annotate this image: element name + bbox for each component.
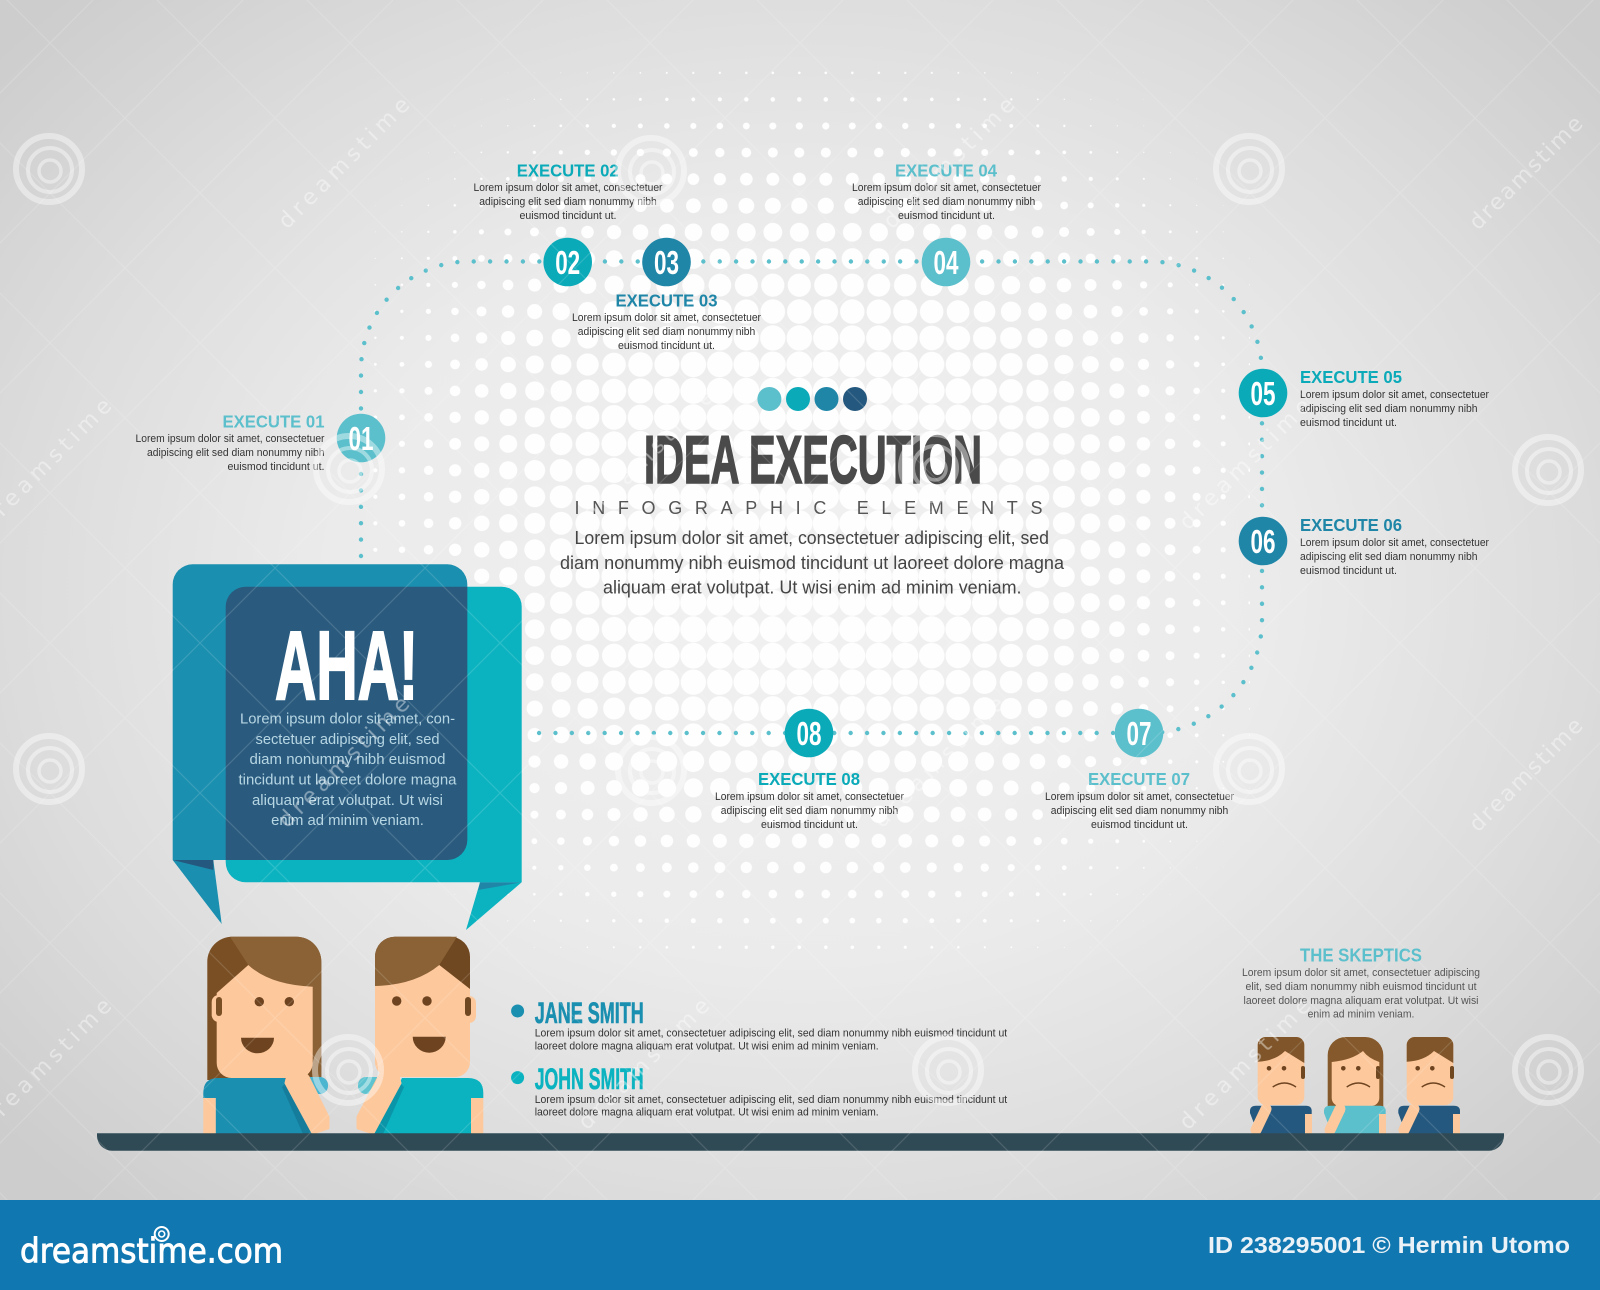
text: execute 04: Lorem ipsum dolor sit amet, consectetuer xyxy=(852,182,1041,194)
subtitle: INFOGRAPHIC ELEMENTS xyxy=(574,498,1042,518)
dotted path xyxy=(361,262,1262,733)
bubble overlap xyxy=(226,587,467,860)
text: execute 03: adipiscing elit sed diam nonummy nibh xyxy=(578,326,755,338)
intro paragraph: diam nonummy nibh euismod tincidunt ut laoreet dolore magna xyxy=(560,553,1065,573)
step 08 marker: 08 xyxy=(796,715,822,752)
speech bubbles xyxy=(173,564,522,930)
text: execute 08: EXECUTE 08 xyxy=(758,769,860,789)
person text: John Smith: Lorem ipsum dolor sit amet, consectetuer adipiscing elit, sed diam nonummy nibh euismod tincidunt ut xyxy=(535,1094,1007,1106)
person text: Jane Smith xyxy=(511,997,1007,1052)
bubble paragraph: aliquam erat volutpat. Ut wisi xyxy=(252,792,443,809)
text: execute 06: adipiscing elit sed diam nonummy nibh xyxy=(1300,551,1478,563)
text: execute 01: EXECUTE 01 xyxy=(222,412,325,432)
step 04 marker: 04 xyxy=(934,244,959,281)
text: execute 04: euismod tincidunt ut. xyxy=(898,210,995,222)
skeptics text xyxy=(1242,946,1480,1021)
text: execute 01 xyxy=(136,412,325,473)
text: execute 03 xyxy=(572,291,761,352)
person text: Jane Smith: laoreet dolore magna aliquam erat volutpat. Ut wisi enim ad minim veniam. xyxy=(535,1040,879,1052)
bubble paragraph: Lorem ipsum dolor sit amet, con- xyxy=(240,710,455,727)
watermark spirals xyxy=(16,136,1581,1103)
step 07 marker: 07 xyxy=(1126,715,1152,752)
left bubble tail xyxy=(173,860,222,924)
text: execute 05: adipiscing elit sed diam nonummy nibh xyxy=(1300,403,1478,415)
text: execute 03: euismod tincidunt ut. xyxy=(618,340,715,352)
text: execute 08 xyxy=(715,769,904,831)
person text: John Smith: laoreet dolore magna aliquam erat volutpat. Ut wisi enim ad minim veniam. xyxy=(535,1106,879,1118)
step 08 marker xyxy=(785,709,833,757)
text: execute 02: EXECUTE 02 xyxy=(517,161,619,181)
step 06 marker: 06 xyxy=(1250,523,1276,560)
text: execute 08: Lorem ipsum dolor sit amet, consectetuer xyxy=(715,791,904,803)
text: execute 04 xyxy=(852,161,1041,222)
intro paragraph xyxy=(560,528,1065,597)
text: execute 02 xyxy=(474,161,663,222)
bubble paragraph: diam nonummy nibh euismod xyxy=(250,751,446,768)
text: execute 07: EXECUTE 07 xyxy=(1088,769,1190,789)
step 03 marker xyxy=(642,238,691,286)
watermark wordmarks: dreamstime xyxy=(1175,994,1316,1135)
AHA heading: AHA! xyxy=(275,611,418,720)
text: execute 07: adipiscing elit sed diam nonummy nibh xyxy=(1051,805,1228,817)
person text: John Smith: JOHN SMITH xyxy=(535,1063,644,1096)
title: IDEA EXECUTION xyxy=(644,422,982,498)
text: execute 06 xyxy=(1300,515,1489,577)
watermark wordmarks: dreamstime xyxy=(1465,714,1588,837)
person text: Jane Smith: JANE SMITH xyxy=(535,997,644,1030)
skeptics text: laoreet dolore magna aliquam erat volutpat. Ut wisi xyxy=(1244,995,1478,1007)
step 01 marker xyxy=(337,414,385,462)
step 07 marker xyxy=(1115,709,1163,757)
step 06 marker xyxy=(1239,517,1287,565)
text: execute 07 xyxy=(1045,769,1234,831)
step 05 marker: 05 xyxy=(1250,375,1276,412)
text: execute 01: euismod tincidunt ut. xyxy=(228,461,324,473)
text: execute 07: Lorem ipsum dolor sit amet, consectetuer xyxy=(1045,791,1234,803)
footer logo: dreamstime.com xyxy=(20,1232,283,1272)
text: execute 05 xyxy=(1300,367,1489,429)
text: execute 08: adipiscing elit sed diam nonummy nibh xyxy=(721,805,898,817)
table bar xyxy=(97,1133,1504,1151)
person text: John Smith xyxy=(511,1063,1007,1118)
intro paragraph: aliquam erat volutpat. Ut wisi enim ad minim veniam. xyxy=(603,577,1022,597)
footer credit: ID 238295001 © Hermin Utomo xyxy=(1208,1232,1570,1258)
step 05 marker xyxy=(1239,369,1287,417)
watermark wordmarks: dreamstime xyxy=(274,692,415,833)
skeptics text: THE SKEPTICS xyxy=(1300,946,1422,966)
footer band xyxy=(0,1200,1600,1290)
text: execute 03: Lorem ipsum dolor sit amet, consectetuer xyxy=(572,312,761,324)
watermark wordmarks: dreamstime xyxy=(869,692,1010,833)
step 03 marker: 03 xyxy=(654,244,679,281)
text: execute 08: euismod tincidunt ut. xyxy=(761,819,858,831)
character: John xyxy=(358,937,483,1134)
text: execute 07: euismod tincidunt ut. xyxy=(1091,819,1188,831)
person text: Jane Smith: Lorem ipsum dolor sit amet, consectetuer adipiscing elit, sed diam nonummy nibh euismod tincidunt ut xyxy=(535,1028,1007,1040)
text: execute 05: EXECUTE 05 xyxy=(1300,367,1402,387)
text: execute 02: adipiscing elit sed diam nonummy nibh xyxy=(479,196,657,208)
text: execute 02: euismod tincidunt ut. xyxy=(520,210,616,222)
four coloured dots xyxy=(757,387,867,411)
step 02 marker xyxy=(543,238,592,286)
watermark wordmarks: dreamstime xyxy=(274,93,415,234)
text: execute 05: Lorem ipsum dolor sit amet, consectetuer xyxy=(1300,389,1489,401)
skeptics text: enim ad minim veniam. xyxy=(1308,1009,1414,1021)
step 02 marker: 02 xyxy=(555,244,580,281)
skeptic 3 xyxy=(1398,1037,1460,1134)
halftone dot field xyxy=(350,62,1250,962)
text: execute 04: adipiscing elit sed diam nonummy nibh xyxy=(858,196,1035,208)
text: execute 06: Lorem ipsum dolor sit amet, consectetuer xyxy=(1300,537,1489,549)
step 04 marker xyxy=(922,238,970,286)
text: execute 01: Lorem ipsum dolor sit amet, consectetuer xyxy=(136,433,325,445)
watermark wordmarks: dreamstime xyxy=(879,93,1020,234)
text: execute 02: Lorem ipsum dolor sit amet, consectetuer xyxy=(474,182,663,194)
character: Jane xyxy=(203,937,328,1134)
watermark wordmarks: dreamstime xyxy=(1175,394,1316,535)
text: execute 06: euismod tincidunt ut. xyxy=(1300,565,1397,577)
text: execute 06: EXECUTE 06 xyxy=(1300,515,1402,535)
intro paragraph: Lorem ipsum dolor sit amet, consectetuer adipiscing elit, sed xyxy=(574,528,1049,548)
watermark wordmarks: dreamstime xyxy=(574,994,715,1135)
bubble paragraph xyxy=(238,710,457,829)
watermark wordmarks: dreamstime xyxy=(578,385,719,526)
step 01 marker: 01 xyxy=(348,420,374,457)
text: execute 05: euismod tincidunt ut. xyxy=(1300,417,1397,429)
text: execute 03: EXECUTE 03 xyxy=(616,291,718,311)
skeptic 1 xyxy=(1250,1037,1312,1134)
skeptics text: elit, sed diam nonummy nibh euismod tincidunt ut xyxy=(1246,981,1476,993)
text: execute 01: adipiscing elit sed diam nonummy nibh xyxy=(147,447,324,459)
skeptic 2 xyxy=(1324,1037,1386,1134)
bubble paragraph: enim ad minim veniam. xyxy=(271,812,424,829)
bubble paragraph: tincidunt ut laoreet dolore magna xyxy=(238,771,457,788)
right bubble tail xyxy=(466,882,522,930)
text: execute 04: EXECUTE 04 xyxy=(895,161,997,181)
teal bubble xyxy=(226,587,522,882)
bubble paragraph: sectetuer adipiscing elit, sed xyxy=(256,731,440,748)
skeptics text: Lorem ipsum dolor sit amet, consectetuer adipiscing xyxy=(1242,967,1480,979)
watermark wordmarks: dreamstime xyxy=(1465,112,1588,235)
blue bubble xyxy=(173,564,467,860)
